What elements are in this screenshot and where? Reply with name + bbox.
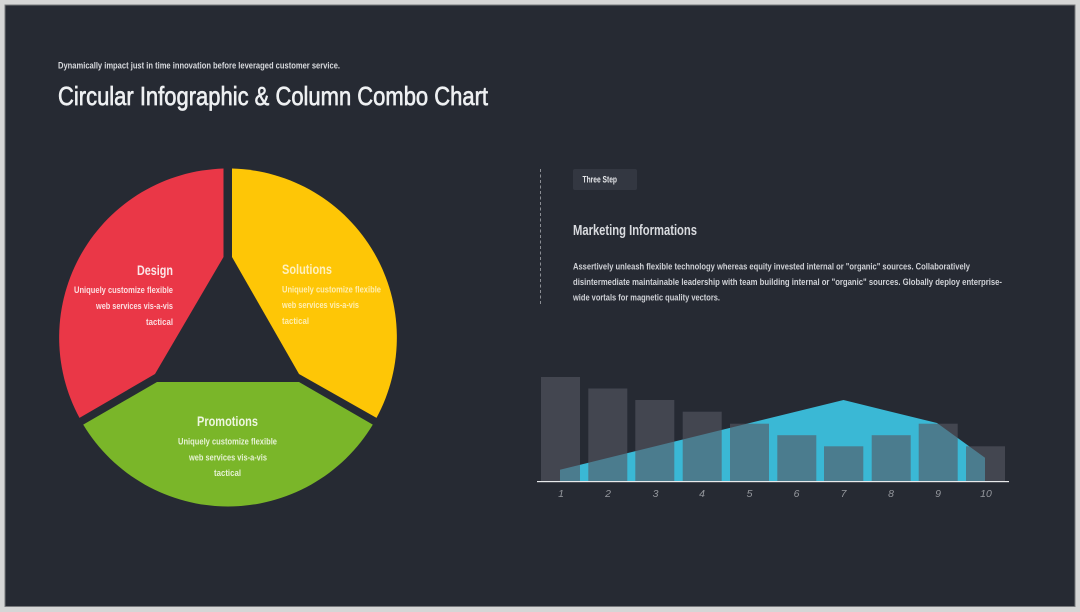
promotions description: Uniquely customize flexible	[178, 436, 277, 448]
design heading: Design	[137, 262, 173, 278]
design description: tactical	[146, 317, 173, 328]
tag: three step: Three Step	[582, 174, 617, 186]
promotions heading: Promotions	[197, 413, 258, 429]
promotions description: web services vis-a-vis	[188, 452, 267, 464]
section paragraph: Assertively unleash flexible technology whereas equity invested internal or "organic" sources. Collaboratively	[573, 262, 971, 272]
solutions description: web services vis-a-vis	[281, 300, 359, 311]
section paragraph	[572, 262, 1002, 304]
design description: Uniquely customize flexible	[74, 285, 173, 296]
axis labels: 10	[980, 488, 992, 500]
axis labels: 5	[747, 488, 753, 500]
tag: three step	[573, 169, 637, 190]
column series	[541, 377, 1005, 482]
promotions description: tactical	[214, 468, 241, 479]
title: Circular Infographic & Column Combo Chart	[58, 81, 489, 111]
axis labels	[558, 488, 992, 500]
solutions description	[281, 284, 381, 327]
axis labels: 4	[699, 488, 705, 500]
solutions description: tactical	[282, 316, 309, 327]
segment: promotions	[83, 382, 373, 506]
chart baseline	[537, 481, 1009, 482]
axis labels: 9	[935, 488, 941, 500]
solutions heading: Solutions	[282, 261, 332, 277]
combo chart	[537, 377, 1009, 500]
section heading: Marketing Informations	[573, 223, 697, 239]
design description	[74, 285, 173, 328]
solutions description: Uniquely customize flexible	[282, 284, 381, 296]
axis labels: 1	[558, 488, 564, 500]
axis labels: 6	[794, 488, 800, 500]
area series	[560, 400, 985, 482]
segment: design	[59, 169, 224, 418]
segment: solutions	[232, 169, 397, 418]
axis labels: 2	[604, 488, 611, 500]
section paragraph: wide vortals for magnetic quality vectors.	[572, 292, 720, 304]
design description: web services vis-a-vis	[95, 301, 173, 312]
axis labels: 7	[841, 488, 848, 500]
subtitle: Dynamically impact just in time innovation before leveraged customer service.	[58, 60, 340, 72]
axis labels: 8	[888, 488, 894, 500]
axis labels: 3	[653, 488, 659, 500]
promotions description	[178, 436, 277, 479]
circular infographic	[59, 169, 397, 506]
